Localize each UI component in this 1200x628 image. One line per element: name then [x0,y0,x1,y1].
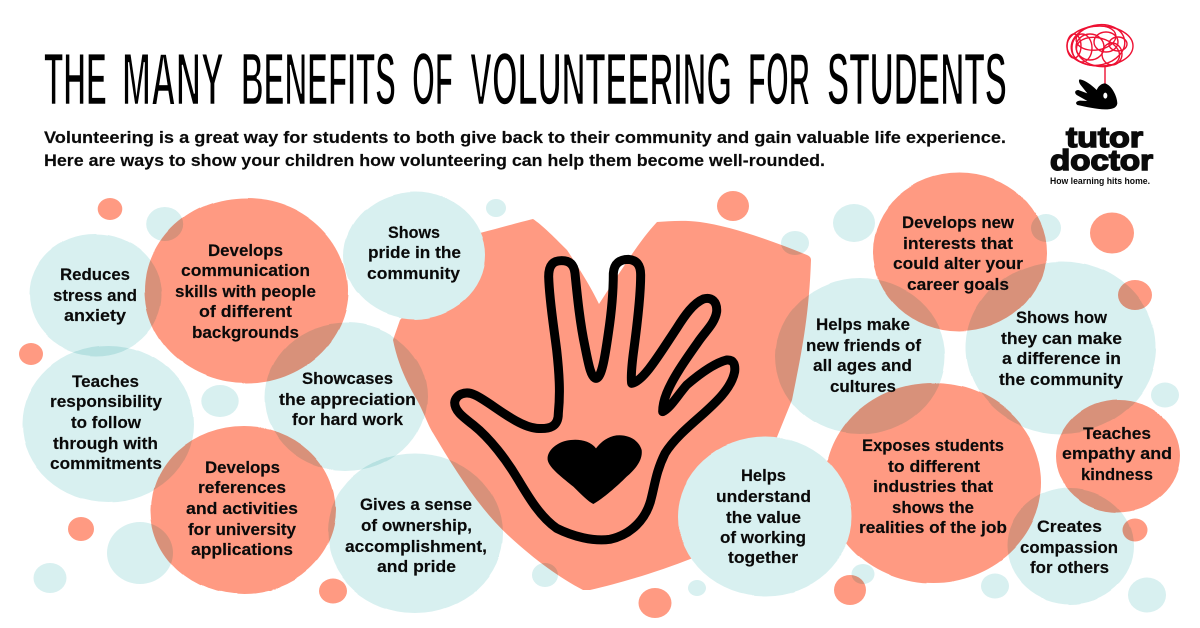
label: for university [188,520,297,539]
label [175,241,316,342]
logo: tutor doctor [1050,20,1153,187]
title: THE [44,37,107,121]
logo wordmark: tutor [1066,122,1143,154]
label [893,213,1023,294]
label: stress and [53,286,137,305]
icon: red brain scribble [1067,20,1133,84]
label: of working [720,528,806,547]
label: community [367,264,461,283]
label: references [198,478,286,497]
bubble: showcases appreciation [265,323,427,471]
bubble: helps make friends [775,278,945,434]
label: Develops [208,241,283,260]
label: compassion [1020,538,1118,557]
label: backgrounds [192,323,299,342]
label [999,308,1124,389]
bubble: gives ownership [328,453,503,613]
decorative dots [19,191,1179,618]
label: through with [53,434,158,453]
bubble: shows how to make a difference [966,261,1156,434]
label: Creates [1037,517,1102,536]
bubble: reduces stress [29,234,162,356]
label: industries that [873,477,993,496]
label: for others [1030,558,1109,577]
bubble: develops new interests [873,173,1046,331]
label: shows the [892,498,974,517]
label: Showcases [302,369,393,388]
label [859,436,1007,537]
hand outline with heart [455,259,735,540]
label: to different [888,457,980,476]
label [716,466,811,567]
title: MANY [122,37,224,121]
intro text [44,128,1006,170]
logo wordmark: How learning hits home. [1050,176,1150,187]
bubble: teaches empathy [1056,400,1180,512]
label [345,495,487,576]
bubble: teaches responsibility [22,346,194,502]
label [367,223,461,283]
label: together [728,548,798,567]
label: Develops new [902,213,1015,232]
label: Shows how [1016,308,1108,327]
label: the community [999,370,1124,389]
label: skills with people [175,282,316,301]
bubble: creates compassion [1007,488,1134,604]
label: Helps make [816,315,910,334]
label: cultures [830,377,896,396]
label: and pride [377,557,456,576]
label: communication [181,261,310,280]
title [44,37,1007,121]
bubble: shows pride [344,192,486,319]
label: they can make [1001,329,1122,348]
bubble: helps understand [678,437,852,596]
label [1062,424,1172,484]
label: and activities [186,499,298,518]
intro text: Here are ways to show your children how volunteering can help them become well-rounded. [44,151,825,170]
icon: black hand [1075,79,1117,109]
label: could alter your [893,254,1023,273]
label: the value [726,508,801,527]
label: interests that [903,234,1013,253]
label: understand [716,487,811,506]
label [50,372,163,473]
label: kindness [1081,465,1153,484]
label: of different [199,302,292,321]
label: anxiety [64,306,127,325]
label: applications [191,540,293,559]
label: responsibility [50,392,163,411]
label: career goals [907,275,1009,294]
label: Gives a sense [360,495,472,514]
label: pride in the [368,243,461,262]
label: accomplishment, [345,537,487,556]
title: OF [412,37,453,121]
title: VOLUNTEERING [470,37,732,121]
label: Exposes students [862,436,1004,455]
logo wordmark [1050,122,1153,187]
label: of ownership, [361,516,472,535]
label: a difference in [1002,349,1121,368]
label: realities of the job [859,518,1007,537]
label: new friends of [806,336,921,355]
heart background [393,219,811,590]
label: all ages and [813,356,912,375]
label: commitments [50,454,162,473]
intro text: Volunteering is a great way for students to both give back to their community and gain valuable life experience. [44,128,1006,147]
icon: heart in palm [548,435,642,504]
label: Shows [388,223,440,242]
label [1020,517,1118,577]
label [186,458,298,559]
label [806,315,921,396]
label: Teaches [1083,424,1151,443]
label: to follow [71,413,142,432]
label: Reduces [60,265,130,284]
label: Develops [205,458,280,477]
label: empathy and [1062,444,1172,463]
bubble: exposes students [825,383,1041,583]
label: Helps [741,466,786,485]
bubble: develops references [151,426,336,594]
title: BENEFITS [241,37,396,121]
title: FOR [748,37,810,121]
hand outline [455,259,735,540]
label: the appreciation [279,390,416,409]
label [279,369,416,429]
label: Teaches [72,372,139,391]
logo wordmark: doctor [1050,145,1153,177]
label [53,265,137,325]
label: for hard work [292,410,404,429]
bubble: develops communication [145,198,348,383]
